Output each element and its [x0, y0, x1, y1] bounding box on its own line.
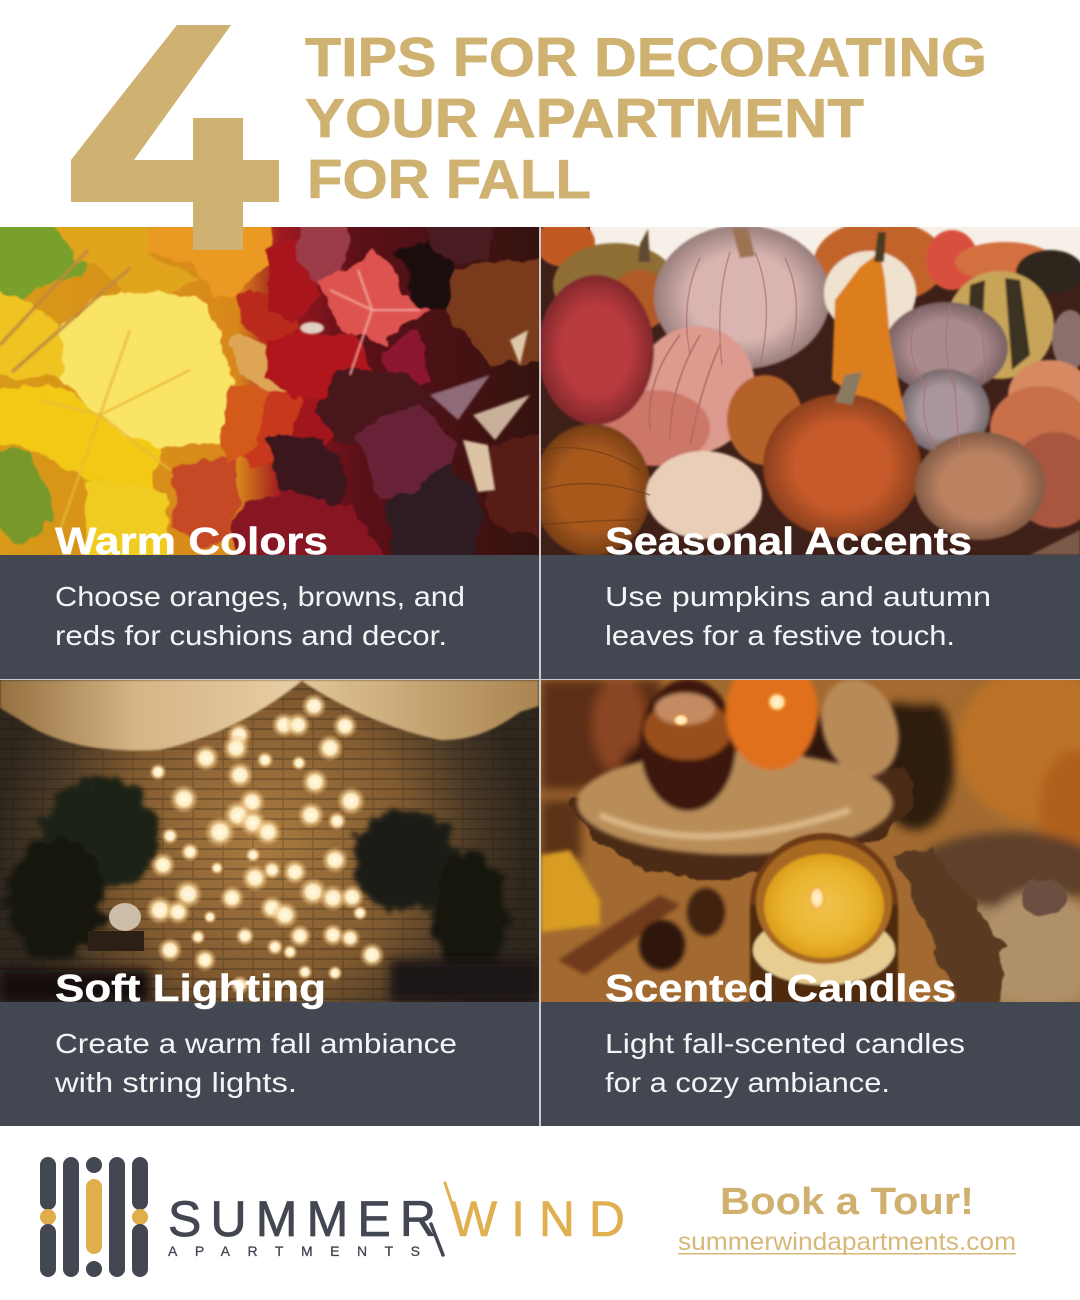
flowers on table: [109, 903, 141, 931]
text: scented candles: for a cozy ambiance.: [605, 1067, 890, 1098]
heading: seasonal accents: Seasonal Accents: [605, 521, 972, 563]
title: [305, 26, 987, 210]
link: website: summerwindapartments.com: [678, 1228, 1016, 1256]
text: seasonal accents: [605, 581, 991, 651]
panel: soft lighting: [0, 968, 539, 1126]
photo: autumn leaves: [0, 227, 539, 555]
photo: pumpkins: [541, 227, 1080, 555]
title: TIPS FOR DECORATING: [305, 26, 987, 88]
drapery: [0, 680, 539, 751]
call to action: [678, 1181, 1016, 1256]
title: YOUR APARTMENT: [305, 87, 864, 149]
text: soft lighting: [54, 1028, 457, 1098]
string light bulbs: [145, 693, 385, 995]
text: soft lighting: with string lights.: [54, 1067, 297, 1098]
text: scented candles: [605, 1028, 965, 1098]
panel: warm colors: [0, 521, 539, 679]
panel: seasonal accents: [541, 521, 1080, 679]
heading: book a tour: Book a Tour!: [720, 1181, 974, 1223]
heading: scented candles: Scented Candles: [605, 968, 956, 1010]
heading: warm colors: Warm Colors: [55, 521, 328, 563]
logo wordmark: apartments: APARTMENTS: [168, 1243, 420, 1259]
logo wordmark: wind: WIND: [450, 1191, 625, 1247]
icon: logo bars: [40, 1157, 148, 1277]
photo: string lights on brick wall: [0, 680, 539, 1002]
text: seasonal accents: Use pumpkins and autumn: [605, 581, 991, 612]
text: soft lighting: Create a warm fall ambiance: [55, 1028, 457, 1059]
heading: soft lighting: Soft Lighting: [55, 968, 326, 1010]
title: FOR FALL: [307, 148, 591, 210]
text: warm colors: [55, 581, 465, 651]
text: seasonal accents: leaves for a festive touch.: [605, 620, 955, 651]
text: warm colors: Choose oranges, browns, and: [55, 581, 465, 612]
text: scented candles: Light fall-scented candles: [605, 1028, 965, 1059]
photo: scented candles: [541, 680, 1080, 1002]
text: warm colors: reds for cushions and decor.: [55, 620, 447, 651]
logo: summerwind apartments: [40, 1157, 625, 1277]
logo wordmark: summer: SUMMER: [168, 1191, 436, 1247]
panel: scented candles: [541, 968, 1080, 1126]
plants: [7, 780, 506, 980]
